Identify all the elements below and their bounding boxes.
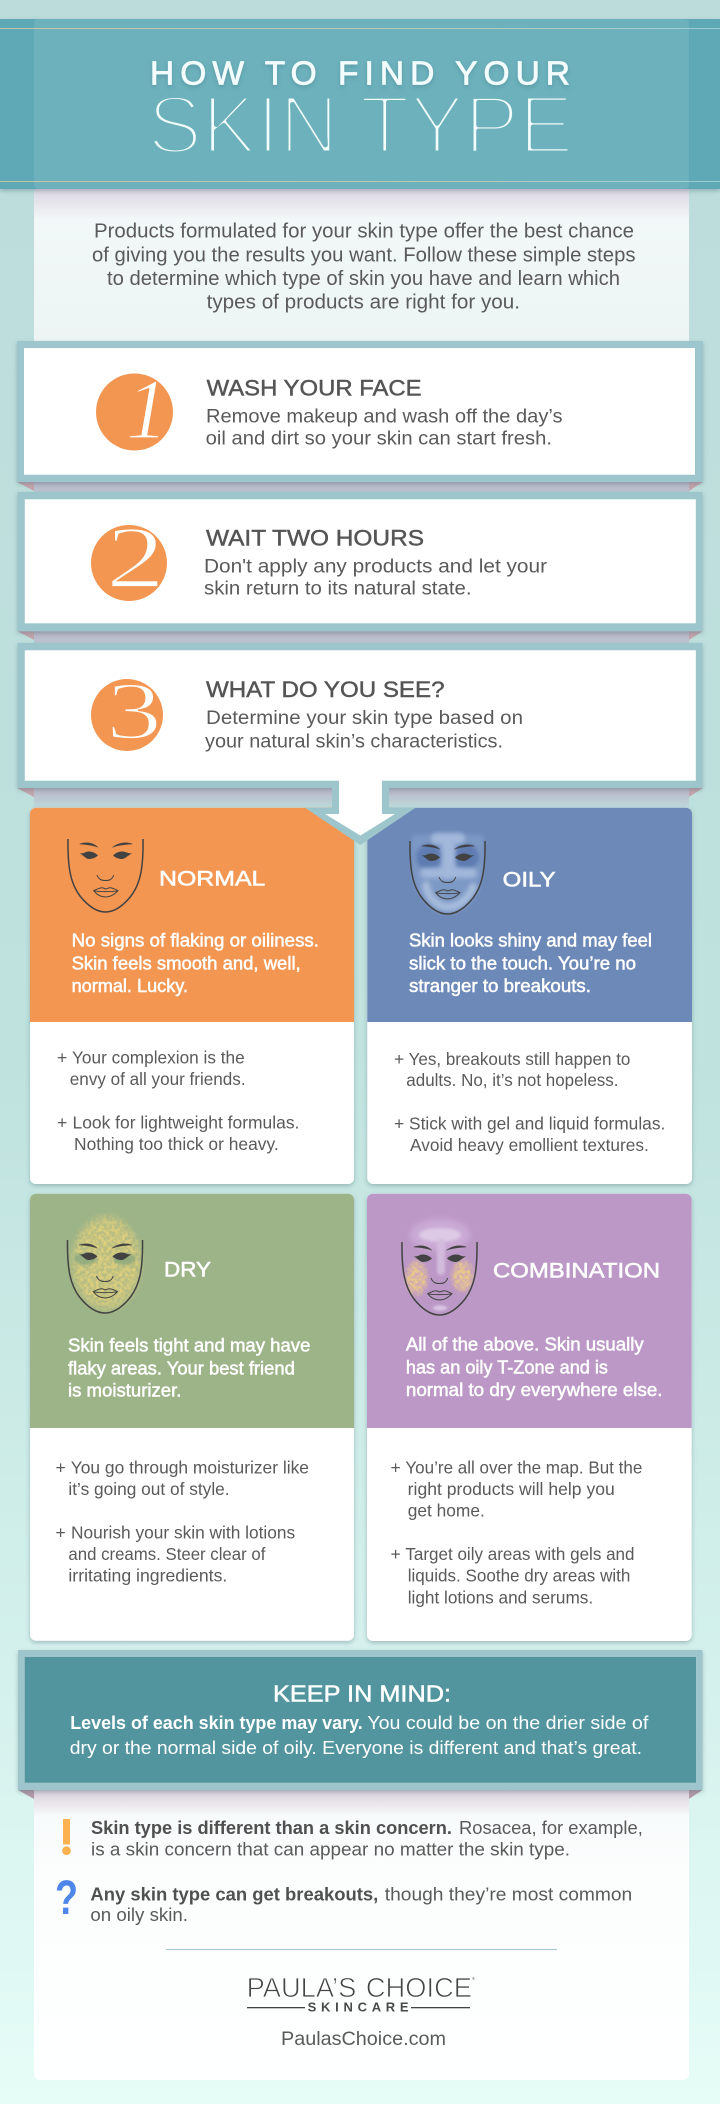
footer panel: [34, 1790, 689, 2080]
step 2 text: [204, 557, 548, 600]
callout text: You could be on the drier side of: [367, 1713, 649, 1733]
oily heading: OILY: [503, 869, 556, 892]
panel: combination: [367, 1194, 692, 1641]
icon: number 2: [91, 525, 167, 601]
intro text: to determine which type of skin you have and learn which: [107, 268, 620, 290]
combination description: [406, 1335, 662, 1400]
icon: number 1: 1: [126, 361, 168, 457]
icon: combination face: [402, 1219, 477, 1315]
combination description: normal to dry everywhere else.: [406, 1380, 662, 1400]
icon: normal face: [68, 839, 143, 912]
dry tips: irritating ingredients.: [68, 1566, 227, 1586]
header banner: [0, 19, 720, 189]
icon: number 3: 3: [106, 665, 162, 756]
dry tips: [56, 1457, 309, 1586]
icon: dry face: [67, 1211, 146, 1315]
note text: Rosacea, for example,: [459, 1818, 643, 1838]
normal tips: +: [57, 1047, 67, 1067]
callout text: [70, 1713, 649, 1758]
oily tips: Yes, breakouts still happen to: [409, 1049, 630, 1069]
note text: [90, 1885, 632, 1925]
combination description: All of the above. Skin usually: [406, 1335, 644, 1355]
normal description: [72, 931, 319, 996]
oily tips: [394, 1049, 665, 1155]
combination tips: get home.: [408, 1501, 485, 1521]
dry heading: DRY: [164, 1259, 211, 1282]
normal tips: +: [57, 1112, 67, 1132]
oily tips: +: [394, 1113, 404, 1133]
dry tips: and creams. Steer clear of: [68, 1544, 266, 1564]
arrow from step 3 to panels: [305, 780, 416, 845]
dry tips: +: [56, 1522, 66, 1542]
combination tips: right products will help you: [408, 1479, 615, 1499]
oily tips: Stick with gel and liquid formulas.: [409, 1113, 665, 1133]
dry tips: it’s going out of style.: [68, 1479, 230, 1499]
note text: Any skin type can get breakouts,: [90, 1885, 378, 1905]
note text: on oily skin.: [90, 1905, 188, 1925]
combination tips: You’re all over the map. But the: [405, 1457, 642, 1477]
step 3 text: Determine your skin type based on: [206, 708, 523, 729]
step 3: [18, 643, 702, 788]
dry description: Skin feels tight and may have: [68, 1336, 310, 1356]
step 2 text: skin return to its natural state.: [204, 579, 472, 600]
icon: number 3: [91, 679, 163, 751]
normal tips: Nothing too thick or heavy.: [74, 1134, 279, 1154]
oily description: stranger to breakouts.: [409, 976, 591, 996]
combination tips: [390, 1457, 642, 1607]
note text: is a skin concern that can appear no matter the skin type.: [91, 1840, 570, 1860]
step 1: [17, 341, 703, 482]
normal description: No signs of flaking or oiliness.: [72, 931, 319, 951]
normal tips: [57, 1047, 299, 1154]
step 1 text: oil and dirt so your skin can start fresh.: [206, 429, 552, 450]
icon: oily face: [410, 833, 485, 914]
oily tips: Avoid heavy emollient textures.: [410, 1135, 649, 1155]
combination tips: Target oily areas with gels and: [405, 1544, 634, 1564]
icon: exclamation mark: [62, 1819, 71, 1855]
step 3 heading: WHAT DO YOU SEE?: [206, 677, 444, 702]
dry tips: You go through moisturizer like: [71, 1457, 309, 1477]
callout heading: KEEP IN MIND:: [273, 1681, 451, 1707]
normal description: Skin feels smooth and, well,: [72, 953, 301, 973]
dry tips: +: [56, 1457, 66, 1477]
oily tips: adults. No, it’s not hopeless.: [406, 1070, 618, 1090]
callout text: Levels of each skin type may vary.: [70, 1713, 363, 1733]
combination tips: light lotions and serums.: [408, 1587, 593, 1607]
dry description: is moisturizer.: [68, 1381, 181, 1401]
callout text: dry or the normal side of oily. Everyone is different and that’s great.: [70, 1738, 642, 1758]
normal tips: Your complexion is the: [72, 1047, 245, 1067]
step 3 text: your natural skin’s characteristics.: [205, 731, 503, 752]
dry description: flaky areas. Your best friend: [68, 1358, 295, 1378]
note: breakouts: [55, 1872, 632, 1925]
website: PaulasChoice.com: [281, 2028, 446, 2050]
step 1 text: Remove makeup and wash off the day’s: [206, 407, 562, 428]
normal description: normal. Lucky.: [72, 976, 188, 996]
note text: Skin type is different than a skin concern.: [91, 1818, 452, 1838]
step 1 heading: WASH YOUR FACE: [207, 376, 422, 401]
combination tips: liquids. Soothe dry areas with: [408, 1566, 630, 1586]
keep in mind callout: [18, 1650, 702, 1799]
centre panel: intro background: [34, 189, 689, 344]
step 2 text: Don't apply any products and let your: [204, 557, 548, 578]
icon: number 1: [96, 374, 173, 450]
oily description: slick to the touch. You’re no: [409, 953, 636, 973]
oily description: Skin looks shiny and may feel: [409, 931, 652, 951]
panel: normal: [30, 808, 354, 1184]
logo: Paula's Choice Skincare: ®: [472, 1976, 475, 1981]
icon: question mark: ?: [55, 1872, 78, 1925]
dry tips: Nourish your skin with lotions: [71, 1522, 295, 1542]
oily description: [409, 931, 652, 996]
strips between step boxes: [17, 482, 703, 1652]
icon: number 2: 2: [106, 510, 165, 607]
step 3 text: [205, 708, 523, 752]
step 2 heading: WAIT TWO HOURS: [206, 526, 424, 551]
normal tips: Look for lightweight formulas.: [72, 1112, 299, 1132]
note: skin concern: [62, 1818, 643, 1860]
intro text: Products formulated for your skin type offer the best chance: [94, 220, 634, 242]
normal tips: envy of all your friends.: [70, 1069, 246, 1089]
intro text: types of products are right for you.: [207, 292, 520, 314]
logo: Paula's Choice Skincare: SKINCARE: [308, 2000, 409, 2015]
title line 2: SKIN TYPE: [148, 79, 574, 171]
panel: oily: [367, 808, 692, 1184]
intro text: [92, 220, 636, 314]
logo: Paula's Choice Skincare: PAULA’S CHOICE: [247, 1972, 472, 2003]
combination tips: +: [390, 1544, 401, 1564]
title line 1: HOW TO FIND YOUR: [150, 56, 570, 93]
combination description: has an oily T-Zone and is: [406, 1357, 608, 1377]
note text: [91, 1818, 643, 1860]
step 1 text: [206, 407, 562, 450]
normal heading: NORMAL: [159, 867, 265, 890]
oily tips: +: [394, 1049, 404, 1069]
intro text: of giving you the results you want. Follow these simple steps: [92, 244, 636, 266]
note text: though they’re most common: [385, 1885, 632, 1905]
step 2: [18, 492, 702, 631]
combination tips: +: [390, 1457, 401, 1477]
combination heading: COMBINATION: [493, 1259, 660, 1282]
dry description: [68, 1336, 310, 1401]
panel: dry: [30, 1194, 354, 1641]
